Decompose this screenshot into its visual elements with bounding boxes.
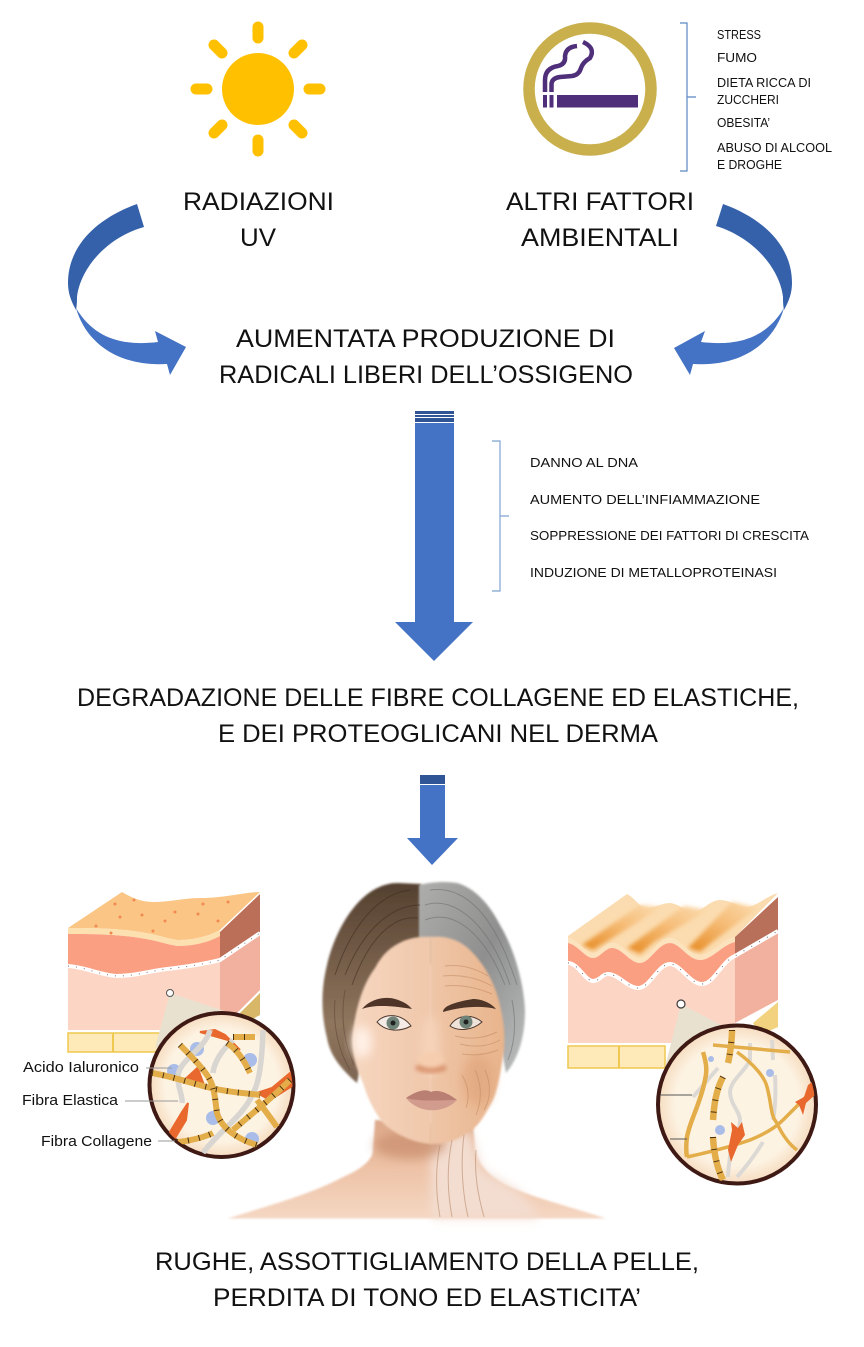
heading: rughe: RUGHE, ASSOTTIGLIAMENTO DELLA PELLE,	[155, 1248, 699, 1276]
label: radiazioni UV: RADIAZIONI	[183, 188, 334, 216]
lips	[406, 1090, 457, 1110]
illustration: aged skin magnifier	[658, 1026, 816, 1184]
list: damage effects: AUMENTO DELL’INFIAMMAZIONE	[530, 492, 760, 507]
face right half	[430, 937, 504, 1144]
list: environmental factors	[717, 28, 832, 172]
label: radiazioni UV	[183, 188, 334, 252]
label: radiazioni UV: UV	[240, 224, 276, 252]
heading: aumentata produzione	[219, 325, 633, 389]
face left half	[352, 937, 431, 1144]
shoulders and neck	[228, 1120, 606, 1218]
hair left	[322, 883, 421, 1083]
wrinkles	[443, 965, 500, 1115]
hair strands	[335, 889, 517, 1070]
list: environmental factors: STRESS	[717, 28, 761, 42]
labels: matrix components: Fibra Collagene	[41, 1133, 152, 1150]
illustration: young skin magnifier	[150, 1013, 294, 1157]
list: environmental factors: OBESITA’	[717, 116, 770, 130]
heading: degradazione: DEGRADAZIONE DELLE FIBRE COLLAGENE ED ELASTICHE,	[77, 684, 799, 712]
illustration: young skin section	[68, 892, 260, 1052]
icon: sun	[196, 27, 320, 151]
label: altri fattori ambientali: AMBIENTALI	[521, 224, 679, 252]
label: altri fattori ambientali: ALTRI FATTORI	[506, 188, 694, 216]
heading: aumentata produzione: AUMENTATA PRODUZIONE DI	[236, 325, 615, 353]
labels: matrix components	[22, 1059, 178, 1150]
list: environmental factors: ABUSO DI ALCOOL	[717, 141, 832, 155]
list: damage effects	[530, 455, 809, 580]
heading: degradazione	[77, 684, 799, 748]
list: environmental factors: DIETA RICCA DI	[717, 76, 811, 90]
arrow: curved right	[674, 204, 792, 375]
heading: rughe: PERDITA DI TONO ED ELASTICITA’	[213, 1284, 641, 1312]
heading: aumentata produzione: RADICALI LIBERI DELL’OSSIGENO	[219, 361, 633, 389]
bracket: environmental factors	[680, 23, 696, 171]
eyes	[377, 1016, 411, 1030]
list: damage effects: DANNO AL DNA	[530, 455, 638, 470]
labels: matrix components: Acido Ialuronico	[23, 1059, 139, 1076]
arrow: long down	[395, 411, 473, 661]
icon: smoking cigarette	[529, 28, 651, 150]
eyebrows	[362, 998, 412, 1009]
highlights and shadows	[421, 1015, 439, 1075]
heading: degradazione: E DEI PROTEOGLICANI NEL DERMA	[218, 720, 658, 748]
list: environmental factors: FUMO	[717, 51, 757, 65]
list: damage effects: SOPPRESSIONE DEI FATTORI DI CRESCITA	[530, 528, 809, 543]
bracket: damage effects	[492, 441, 509, 591]
photo: half young half aged face	[228, 882, 606, 1218]
arrow: curved left	[68, 204, 186, 375]
heading: rughe	[155, 1248, 699, 1312]
label: altri fattori ambientali	[506, 188, 694, 252]
labels: matrix components: Fibra Elastica	[22, 1092, 119, 1109]
list: environmental factors: ZUCCHERI	[717, 93, 779, 107]
illustration: aged skin section	[568, 893, 778, 1075]
list: environmental factors: E DROGHE	[717, 158, 782, 172]
list: damage effects: INDUZIONE DI METALLOPROTEINASI	[530, 565, 777, 580]
arrow: short down	[407, 775, 458, 865]
hair right	[419, 882, 525, 1073]
